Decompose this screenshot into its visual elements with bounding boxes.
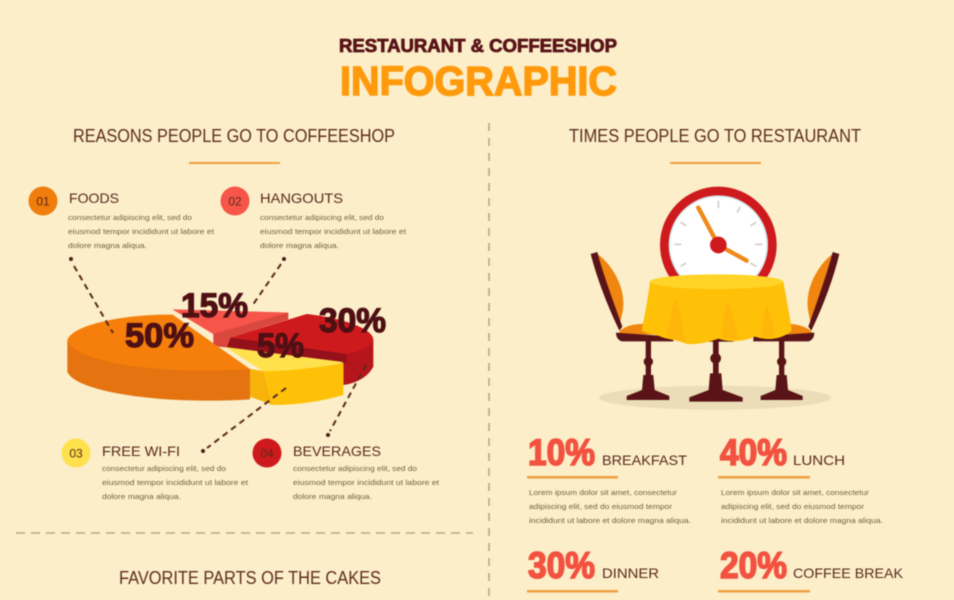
stat: 40% lunch: LUNCH [793, 452, 845, 468]
3D pie chart [67, 287, 386, 405]
stat: 10% breakfast: 10% [528, 432, 595, 473]
icon: tablecloth [642, 274, 792, 344]
stat: 30% dinner [527, 545, 659, 592]
item 04: beverages: eiusmod tempor incididunt ut labore et [293, 478, 440, 487]
slice: free wi-fi 5% [225, 347, 343, 405]
icon: left chair [591, 252, 673, 400]
item 04: beverages: BEVERAGES [293, 443, 381, 459]
item 02: hangouts: HANGOUTS [260, 190, 343, 206]
heading: favorite parts of the cakes: FAVORITE PARTS OF THE CAKES [119, 568, 381, 588]
item 03: free wi-fi: FREE WI-FI [102, 443, 180, 459]
stat: 30% dinner: 30% [528, 545, 595, 586]
item 03: free wi-fi: dolore magna aliqua. [102, 492, 181, 501]
stat: 10% breakfast: BREAKFAST [602, 452, 687, 468]
stat: 10% breakfast [527, 432, 691, 525]
item 02: hangouts [220, 186, 407, 250]
item 03: free wi-fi: 03 [69, 446, 83, 460]
item 01: foods: consectetur adipiscing elit, sed do [68, 213, 192, 222]
item 01: foods: eiusmod tempor incididunt ut labore et [68, 227, 215, 236]
stat: 40% lunch [718, 432, 883, 525]
heading: reasons people go to coffeeshop: REASONS PEOPLE GO TO COFFEESHOP [73, 126, 395, 146]
item 03: free wi-fi: consectetur adipiscing elit, sed do [102, 464, 226, 473]
label: 50%: 50% [125, 317, 194, 355]
arrow: foods to pie [69, 257, 113, 333]
stat: 30% dinner: DINNER [602, 565, 659, 581]
icon: right chair [753, 252, 839, 400]
icon: table stand [689, 338, 743, 402]
item 04: beverages: consectetur adipiscing elit, sed do [293, 464, 417, 473]
item 04: beverages [252, 438, 440, 501]
title: RESTAURANT & COFFEESHOP [339, 36, 617, 56]
item 01: foods: 01 [36, 194, 50, 208]
label: 30%: 30% [319, 302, 386, 340]
item 03: free wi-fi [62, 438, 249, 501]
stat: 40% lunch: incididunt ut labore et dolore magna aliqua. [721, 516, 883, 525]
heading: times people go to restaurant: TIMES PEOPLE GO TO RESTAURANT [569, 126, 861, 146]
item 01: foods: dolore magna aliqua. [68, 241, 147, 250]
label: 15%: 15% [181, 287, 248, 325]
stat: 10% breakfast: Lorem ipsum dolor sit amet, consectetur [529, 488, 678, 497]
item 02: hangouts: consectetur adipiscing elit, sed do [260, 213, 384, 222]
slice: beverages 30% [227, 314, 373, 385]
slice: foods 50% [67, 315, 250, 401]
stat: 10% breakfast: incididunt ut labore et dolore magna aliqua. [529, 516, 691, 525]
item 02: hangouts: dolore magna aliqua. [260, 241, 339, 250]
stat: 20% coffee break: COFFEE BREAK [793, 565, 904, 581]
stat: 40% lunch: 40% [720, 432, 787, 473]
title: INFOGRAPHIC [340, 58, 617, 104]
item 03: free wi-fi: eiusmod tempor incididunt ut labore et [102, 478, 249, 487]
stat: 20% coffee break [718, 545, 904, 592]
item 01: foods: FOODS [69, 190, 119, 206]
stat: 10% breakfast: adipiscing elit, sed do eiusmod tempor [529, 502, 673, 511]
label: 5%: 5% [257, 327, 304, 365]
item 01: foods [28, 186, 215, 250]
arrow: hangouts to pie [252, 257, 286, 306]
stat: 40% lunch: Lorem ipsum dolor sit amet, consectetur [721, 488, 870, 497]
arrow: free wi-fi to pie [201, 388, 286, 453]
floor shadow [599, 386, 831, 410]
item 04: beverages: dolore magna aliqua. [293, 492, 372, 501]
illustration: table, chairs and clock [591, 187, 839, 410]
slice: hangouts 15% [173, 309, 288, 348]
stat: 40% lunch: adipiscing elit, sed do eiusmod tempor [721, 502, 865, 511]
icon: clock [660, 187, 777, 303]
item 02: hangouts: eiusmod tempor incididunt ut labore et [260, 227, 407, 236]
title [339, 36, 617, 104]
arrow: beverages to pie [326, 365, 366, 437]
stat: 20% coffee break: 20% [720, 545, 787, 586]
item 02: hangouts: 02 [228, 194, 242, 208]
item 04: beverages: 04 [260, 446, 274, 460]
